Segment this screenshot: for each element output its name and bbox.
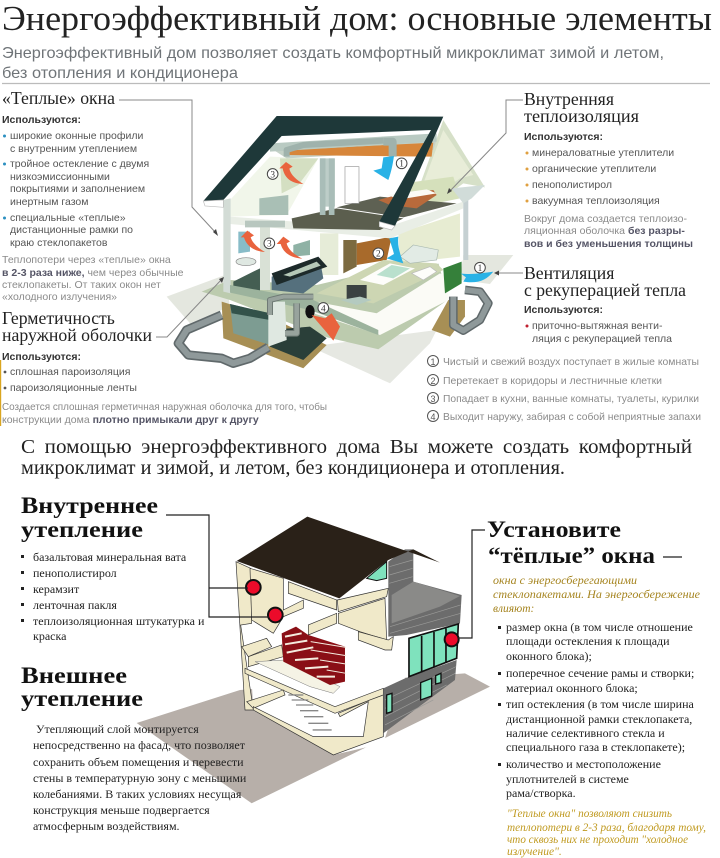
legend: airflow steps: Чистый и свежий воздух поступает в жилые комнаты: [443, 356, 699, 368]
panel: inner insulation: [524, 89, 693, 250]
panel: heat recovery ventilation: с рекуперацией тепла: [524, 280, 686, 300]
panel: install warm windows: количество и местоположение: [506, 757, 661, 771]
panel: install warm windows: поперечное сечение рамы и створки;: [506, 666, 694, 680]
callout: warm windows note: излучение".: [507, 846, 562, 858]
panel: inner insulation: пенополистирол: [532, 179, 612, 191]
panel: house cutaway illustration: 4: [321, 304, 326, 314]
panel: inner insulation: Используются:: [524, 131, 603, 143]
panel: warm windows: специальные «теплые»: [10, 212, 126, 224]
subtitle: Энергоэффективный дом позволяет создать комфортный микроклимат зимой и летом,: [2, 45, 664, 62]
panel: outer insulation: Внешнее: [21, 663, 127, 688]
panel: inner insulation list: керамзит: [33, 582, 80, 596]
panel: install warm windows: тип остекления (в том числе ширина: [506, 697, 695, 711]
panel: inner insulation list: теплоизоляционная штукатурка и: [33, 614, 205, 628]
panel: inner insulation list: утепление: [21, 517, 143, 542]
leader lines for second house: [166, 515, 682, 638]
callout: warm windows note: "Теплые окна" позволяют снизить: [507, 808, 672, 820]
panel: install warm windows: размер окна (в том числе отношение: [506, 620, 693, 634]
panel: inner insulation: вов и без уменьшения толщины: [524, 238, 693, 250]
panel: inner insulation: органические утеплители: [532, 163, 656, 175]
panel: install warm windows: “тёплые” окна: [488, 543, 656, 568]
panel: house cutaway illustration: 1: [399, 160, 404, 170]
panel: outer insulation: стены в температурную зону с меньшими: [33, 771, 247, 785]
panel: install warm windows: стеклопакетами. На энергосбережение: [493, 589, 700, 601]
panel: house cutaway illustration: [167, 116, 513, 383]
panel: install warm windows: рама/створка.: [506, 786, 576, 800]
panel: warm windows: «Теплые» окна: [2, 88, 115, 108]
panel: outer insulation: сохранить объем помещения и перевести: [33, 755, 244, 769]
panel: outer insulation: непосредственно на фасад, что позволяет: [33, 738, 246, 752]
legend: airflow steps: 2: [430, 376, 436, 386]
panel: house cutaway illustration: 1: [478, 264, 483, 274]
panel: airtight envelope: конструкции дома плотно примыкали друг к другу: [2, 414, 259, 426]
panel: outer insulation: [21, 663, 247, 833]
leader lines for upper house: [119, 100, 523, 337]
panel: warm windows: [2, 88, 184, 303]
panel: airtight envelope: [0, 308, 327, 426]
panel: inner insulation list: краска: [33, 629, 67, 643]
legend: airflow steps: Выходит наружу, забирая с собой неприятные запахи: [443, 411, 701, 423]
panel: airtight envelope: Создается сплошная герметичная наружная оболочка для того, чтобы: [2, 401, 327, 413]
panel: airtight envelope: сплошная пароизоляция: [10, 366, 130, 378]
panel: warm windows: инертным газом: [10, 196, 88, 208]
panel: warm windows: «холодного излучения»: [2, 291, 117, 303]
subtitle: без отопления и кондиционера: [2, 65, 238, 82]
panel: airtight envelope: наружной оболочки: [2, 325, 153, 345]
panel: inner insulation list: ленточная пакля: [33, 598, 117, 612]
panel: inner insulation: Вокруг дома создается теплоизо-: [524, 213, 687, 225]
panel: outer insulation: конструкция меньше подвергается: [33, 803, 210, 817]
panel: warm windows: низкоэмиссионными: [10, 171, 110, 183]
panel: install warm windows: наличие селективного стекла и: [506, 726, 665, 740]
panel: heat recovery ventilation: [524, 263, 686, 345]
panel: heat recovery ventilation: приточно-вытяжная венти-: [532, 320, 663, 332]
panel: heat recovery ventilation: ляция с рекуперацией тепла: [532, 333, 672, 345]
panel: airtight envelope: Герметичность: [2, 308, 115, 328]
legend: airflow steps: 4: [430, 412, 436, 422]
panel: house cutaway illustration: 3: [267, 240, 272, 250]
panel: inner insulation: теплоизоляция: [524, 106, 639, 126]
legend: airflow steps: Попадает в кухни, ванные комнаты, туалеты, курилки: [443, 393, 699, 405]
intro paragraph: [21, 437, 692, 479]
panel: warm windows: Используются:: [2, 114, 81, 126]
panel: warm windows: в 2-3 раза ниже, чем через обычные: [2, 267, 184, 279]
panel: install warm windows: дистанционной рамки стеклопакета,: [506, 712, 692, 726]
callout: warm windows note: что сквозь них не проходит "холодное: [507, 834, 688, 846]
panel: install warm windows: [487, 517, 700, 800]
panel: install warm windows: специального газа в стеклопакете);: [506, 740, 685, 754]
title: Энергоэффективный дом: основные элементы: [2, 0, 712, 38]
panel: airtight envelope: пароизоляционные ленты: [10, 382, 137, 394]
panel: outer insulation: атмосферным воздействиям.: [33, 819, 180, 833]
panel: house cutaway illustration: 3: [270, 170, 275, 180]
panel: outer insulation: утепление: [21, 686, 143, 711]
panel: install warm windows: площади остекления к площади: [506, 634, 670, 648]
panel: inner insulation list: [21, 493, 205, 643]
panel: inner insulation list: базальтовая минеральная вата: [33, 550, 187, 564]
panel: outer insulation: колебаниями. В таких условиях несущая: [33, 787, 242, 801]
panel: house cutaway illustration: 2: [376, 250, 381, 260]
legend: airflow steps: 3: [430, 394, 436, 404]
panel: install warm windows: оконного блока);: [506, 649, 592, 663]
panel: inner insulation: вакуумная теплоизоляция: [532, 195, 660, 207]
panel: install warm windows: материал оконного блока;: [506, 681, 638, 695]
panel: warm windows: стеклопакеты. От таких окон нет: [2, 279, 161, 291]
legend: airflow steps: 1: [430, 357, 436, 367]
panel: inner insulation: ляционная оболочка без разры-: [524, 225, 685, 237]
panel: install warm windows: влияют:: [493, 603, 534, 615]
panel: warm windows: покрытиями и заполнением: [10, 183, 145, 195]
callout: warm windows note: [507, 808, 706, 858]
legend: airflow steps: Перетекает в коридоры и лестничные клетки: [443, 375, 662, 387]
panel: warm windows: краю стеклопакетов: [10, 237, 108, 249]
panel: heat recovery ventilation: Используются:: [524, 304, 603, 316]
subtitle: [2, 45, 664, 82]
panel: warm windows: с внутренним утеплением: [10, 143, 137, 155]
panel: warm windows: широкие оконные профили: [10, 130, 143, 142]
panel: airtight envelope: Используются:: [2, 351, 81, 363]
panel: heat recovery ventilation: Вентиляция: [524, 263, 614, 283]
panel: second house illustration: [137, 517, 490, 803]
panel: inner insulation: минераловатные утеплители: [532, 147, 674, 159]
callout: warm windows note: теплопотери в 2-3 раза, благодаря тому,: [507, 822, 706, 834]
panel: inner insulation list: пенополистирол: [33, 566, 117, 580]
panel: install warm windows: окна с энергосберегающими: [493, 575, 637, 587]
panel: install warm windows: Установите: [487, 517, 621, 542]
intro paragraph: С помощью энергоэффективного дома Вы можете создать комфортный: [21, 437, 692, 458]
panel: inner insulation: Внутренняя: [524, 89, 614, 109]
panel: warm windows: тройное остекление с двумя: [10, 158, 149, 170]
panel: warm windows: Теплопотери через «теплые» окна: [2, 254, 171, 266]
intro paragraph: микроклимат и зимой, и летом, без кондиционера и отопления.: [21, 458, 565, 479]
legend: airflow steps: [428, 356, 701, 423]
panel: install warm windows: уплотнителей в системе: [506, 772, 629, 786]
panel: warm windows: дистанционные рамки по: [10, 224, 133, 236]
panel: inner insulation list: Внутреннее: [21, 493, 158, 518]
panel: outer insulation: Утепляющий слой монтируется: [36, 722, 199, 736]
